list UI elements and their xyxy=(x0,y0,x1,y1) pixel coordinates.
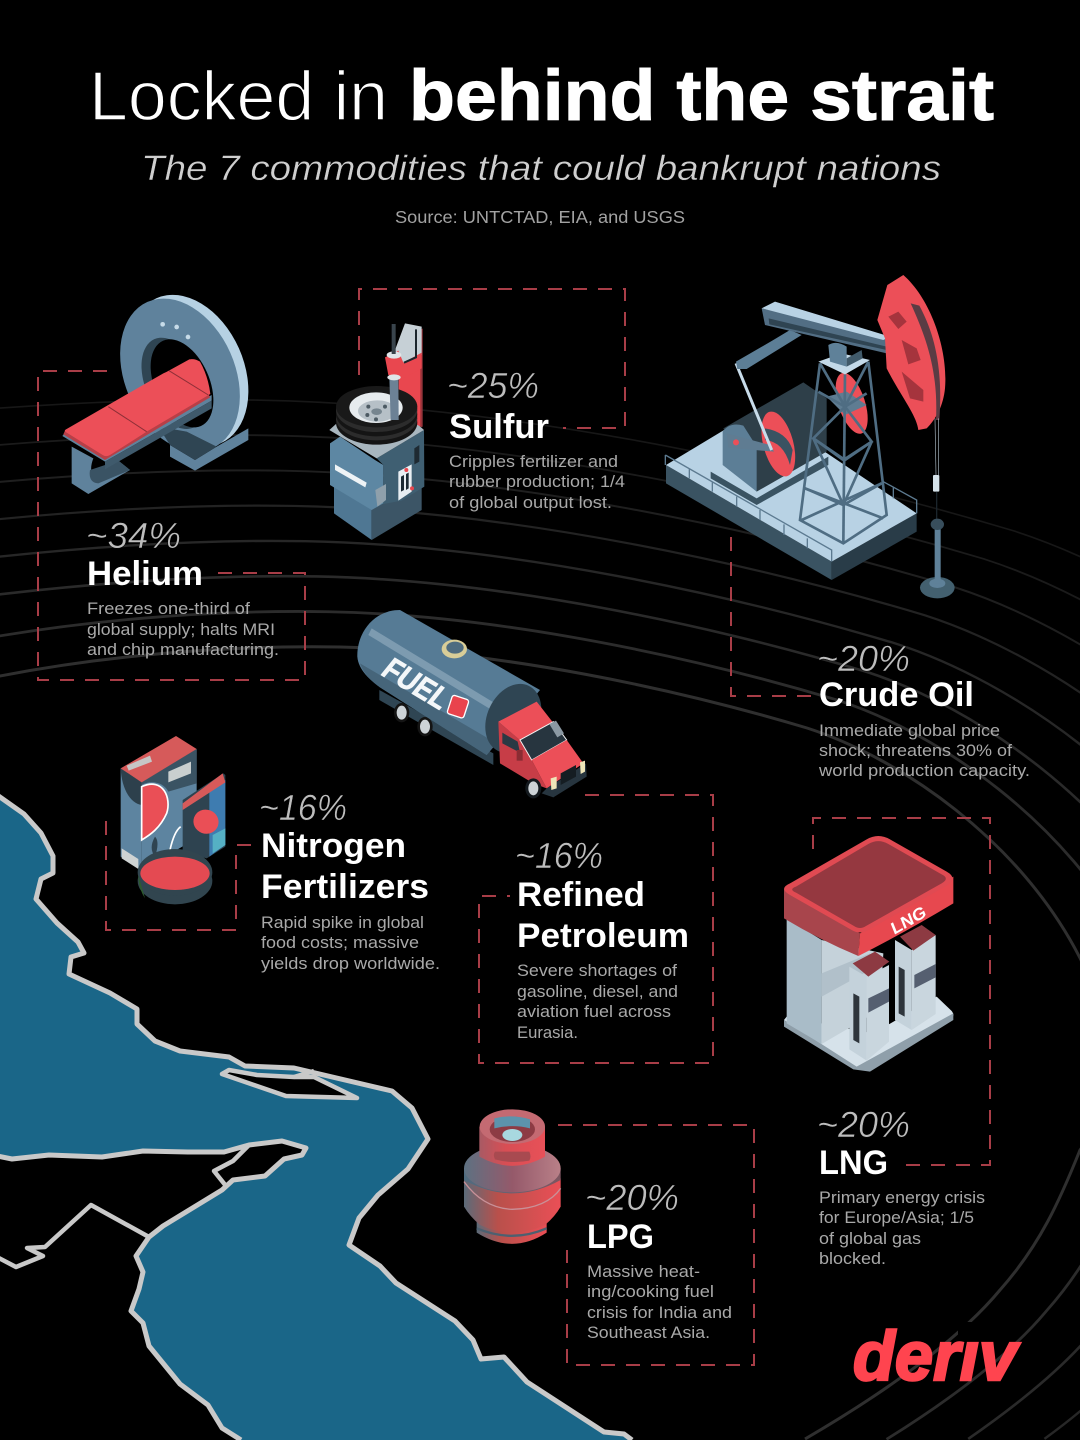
text: helium description: and chip manufacturing. xyxy=(87,640,279,659)
heading: nitrogen fertilizers: Fertilizers xyxy=(261,868,429,906)
logo: deriv: deriv xyxy=(853,1317,1021,1395)
stat: sulfur percentage: ~25% xyxy=(447,365,539,406)
subtitle: The 7 commodities that could bankrupt nations xyxy=(141,149,941,188)
icon: tyre changer xyxy=(329,323,424,540)
heading: LNG: LNG xyxy=(819,1144,888,1182)
text: LNG description: of global gas xyxy=(819,1229,921,1248)
text: nitrogen description: yields drop worldwide. xyxy=(261,954,440,973)
heading: crude oil: Crude Oil xyxy=(819,676,974,714)
heading: helium: Helium xyxy=(87,555,203,593)
text: LPG description: Southeast Asia. xyxy=(587,1323,710,1342)
panel: helium xyxy=(38,276,305,680)
text: helium description: global supply; halts MRI xyxy=(87,620,275,639)
text: refined petroleum description: aviation fuel across xyxy=(517,1002,671,1021)
panel: LPG xyxy=(464,1109,754,1365)
heading: refined petroleum xyxy=(517,876,689,955)
text: refined petroleum description xyxy=(517,961,678,1042)
heading: nitrogen fertilizers xyxy=(261,827,429,906)
text: LNG description: for Europe/Asia; 1/5 xyxy=(819,1208,974,1227)
text: sulfur description xyxy=(449,452,625,512)
icon: LNG station: LNG xyxy=(888,902,929,939)
text: refined petroleum description: Eurasia. xyxy=(517,1023,578,1042)
heading: LPG: LPG xyxy=(587,1218,654,1256)
text: helium description: Freezes one-third of xyxy=(87,599,250,618)
icon: oil pumpjack xyxy=(665,275,955,598)
stat: LPG percentage: ~20% xyxy=(585,1177,679,1218)
text: LNG description: Primary energy crisis xyxy=(819,1188,985,1207)
panel: sulfur xyxy=(329,289,625,540)
text: sulfur description: rubber production; 1/4 xyxy=(449,472,625,491)
text: crude oil description: Immediate global price xyxy=(819,721,1000,740)
title xyxy=(89,57,994,136)
text: LPG description: crisis for India and xyxy=(587,1303,732,1322)
text: refined petroleum description: gasoline, diesel, and xyxy=(517,982,678,1001)
heading: refined petroleum: Petroleum xyxy=(517,917,689,955)
text: crude oil description xyxy=(818,721,1030,780)
text: nitrogen description: Rapid spike in global xyxy=(261,913,424,932)
title: Locked in xyxy=(89,57,388,135)
text: LPG description: Massive heat- xyxy=(587,1262,700,1281)
panel: LNG xyxy=(784,818,990,1268)
panel: refined petroleum xyxy=(357,610,713,1063)
stat: LNG percentage: ~20% xyxy=(817,1104,910,1145)
text: LPG description: ing/cooking fuel xyxy=(587,1282,714,1301)
text: LNG description xyxy=(819,1188,985,1268)
icon: fuel truck: FUEL xyxy=(375,651,458,716)
icon: LNG station xyxy=(784,836,953,1072)
text: LPG description xyxy=(587,1262,732,1342)
heading: refined petroleum: Refined xyxy=(517,876,645,914)
icon: fuel truck xyxy=(357,610,587,798)
icon: LPG cylinder xyxy=(464,1109,561,1244)
heading: sulfur: Sulfur xyxy=(449,408,549,446)
icon: MRI scanner xyxy=(62,276,271,494)
text: sulfur description: of global output lost. xyxy=(449,493,612,512)
icon: fertilizer box and bowl xyxy=(121,736,225,904)
source: Source: UNTCTAD, EIA, and USGS xyxy=(395,207,685,227)
text: nitrogen description xyxy=(261,913,440,973)
stat: crude oil percentage: ~20% xyxy=(817,638,910,679)
title: behind the strait xyxy=(409,57,994,136)
stat: nitrogen percentage: ~16% xyxy=(259,787,347,828)
map: strait and coastline xyxy=(0,795,632,1440)
text: refined petroleum description: Severe shortages of xyxy=(517,961,677,980)
text: sulfur description: Cripples fertilizer and xyxy=(449,452,618,471)
stat: helium percentage: ~34% xyxy=(86,515,181,556)
text: nitrogen description: food costs; massive xyxy=(261,933,419,952)
text: crude oil description: shock; threatens 30% of xyxy=(819,741,1012,760)
heading: nitrogen fertilizers: Nitrogen xyxy=(261,827,406,865)
text: crude oil description: world production capacity. xyxy=(818,761,1030,780)
stat: refined petroleum percentage: ~16% xyxy=(515,835,603,876)
text: LNG description: blocked. xyxy=(819,1249,886,1268)
text: helium description xyxy=(87,599,279,659)
panel: nitrogen fertilizers xyxy=(106,736,440,973)
panel: crude oil xyxy=(665,275,1030,780)
